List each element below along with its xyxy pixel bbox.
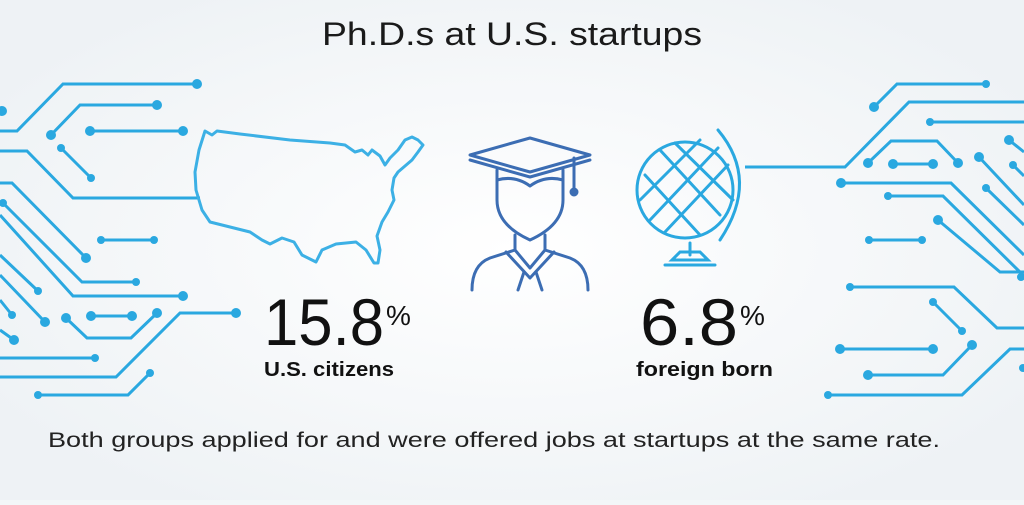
stat: US citizens: U.S. citizens <box>264 359 394 381</box>
icon: graduate <box>470 138 590 290</box>
icon: US map <box>195 131 423 263</box>
circuit: left <box>0 79 241 399</box>
icon: globe <box>637 130 740 265</box>
stat: foreign born: 6.8 <box>640 285 738 359</box>
stat: US citizens: 15.8 <box>264 285 384 359</box>
title: Ph.D.s at U.S. startups <box>322 16 702 52</box>
circuit: right <box>745 80 1024 399</box>
stat: US citizens <box>264 285 411 381</box>
stat: foreign born: foreign born <box>636 359 773 381</box>
stat: US citizens: % <box>386 300 411 331</box>
footer text: Both groups applied for and were offered jobs at startups at the same rate. <box>48 429 940 452</box>
stat: foreign born <box>636 285 773 381</box>
stat: foreign born: % <box>740 300 765 331</box>
